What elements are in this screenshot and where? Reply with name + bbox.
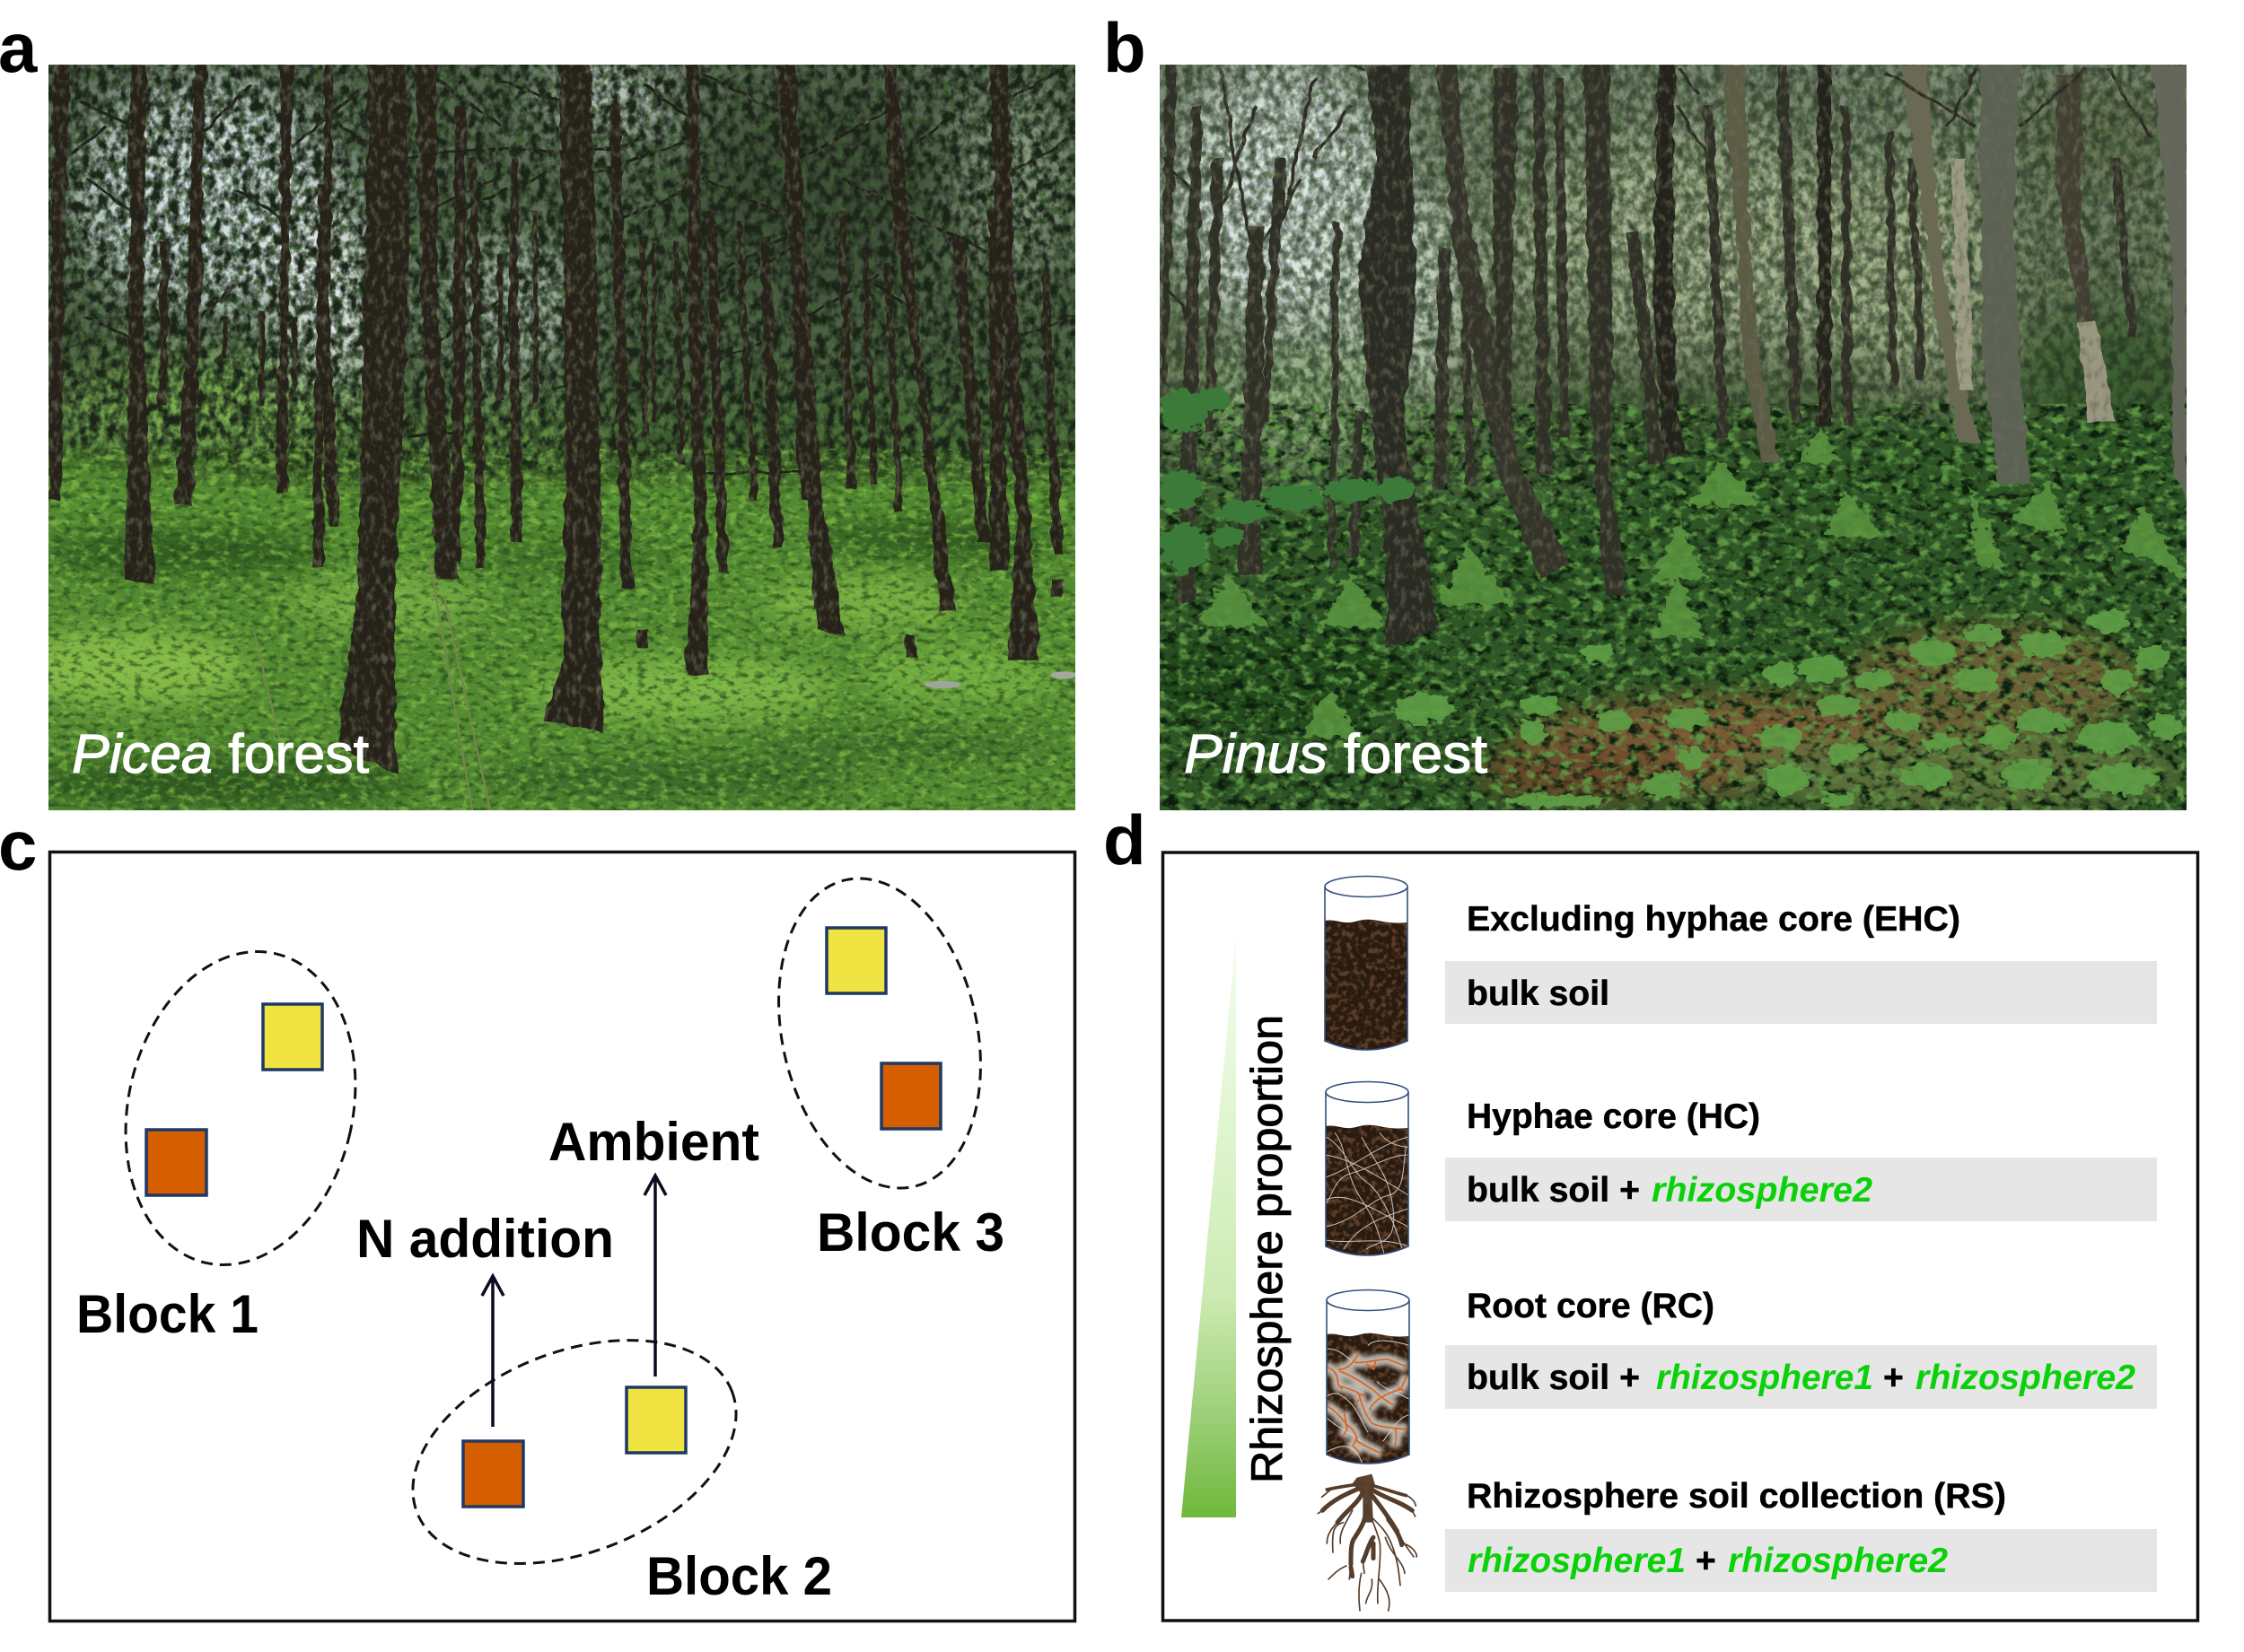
tree trunks <box>48 65 1074 774</box>
row 2: Hyphae core: rhizosphere2 <box>1652 1171 1872 1210</box>
row 4: Rhizosphere soil collection: + <box>1696 1542 1716 1580</box>
gradient triangle: rhizosphere proportion <box>1181 935 1236 1517</box>
Block 2 plots <box>381 1298 768 1606</box>
row 3: Root core <box>1445 1287 2157 1409</box>
row 3: Root core: rhizosphere1 <box>1656 1359 1873 1397</box>
Block 1 plots <box>96 929 385 1288</box>
row 4: Rhizosphere soil collection: rhizosphere1 <box>1468 1542 1686 1580</box>
icon: RC soil core with roots <box>1325 1290 1411 1475</box>
icon: plant root system <box>1318 1474 1416 1611</box>
row 1: Excluding hyphae core: Excluding hyphae core (EHC) <box>1467 900 1960 939</box>
row 1: Excluding hyphae core <box>1445 900 2157 1024</box>
grass slope with light and shade <box>9 453 1086 826</box>
ferns <box>1198 426 2187 738</box>
row 3: Root core: Root core (RC) <box>1467 1287 1714 1325</box>
ground leaves <box>1395 610 2181 807</box>
label: Ambient: Ambient <box>548 1112 759 1172</box>
panel a: Picea forest photo <box>9 63 1086 826</box>
row 3: Root core: bulk soil + <box>1467 1359 1640 1397</box>
row 4: Rhizosphere soil collection: Rhizosphere soil collection (RS) <box>1467 1477 2006 1516</box>
label: N addition: N addition <box>356 1209 614 1269</box>
arrow: N addition <box>482 1276 504 1427</box>
leafy branch at left <box>1159 389 1414 572</box>
row 3: Root core: + <box>1883 1359 1904 1397</box>
Block 3 plots <box>750 859 1009 1208</box>
row 4: Rhizosphere soil collection: rhizosphere2 <box>1728 1542 1948 1580</box>
row 1: Excluding hyphae core: bulk soil <box>1467 975 1609 1013</box>
panel d: sampling cores <box>1163 852 2197 1621</box>
icon: HC soil core with hyphae <box>1324 1082 1410 1267</box>
row 3: Root core: rhizosphere2 <box>1915 1359 2135 1397</box>
icon: EHC soil core <box>1323 876 1409 1062</box>
arrow: Ambient <box>644 1176 666 1377</box>
panel label b: b <box>1103 8 1146 87</box>
photo caption: Picea forest: Picea forest <box>72 723 369 784</box>
Block 2 label: Block 2 <box>646 1546 832 1606</box>
Block 1 label: Block 1 <box>76 1284 259 1344</box>
panel label d: d <box>1103 800 1146 879</box>
axis label: Rhizosphere proportion <box>1243 1015 1292 1483</box>
forest floor <box>1140 415 2199 826</box>
panel b: Pinus forest photo <box>1140 63 2208 826</box>
Block 3 label: Block 3 <box>817 1202 1004 1263</box>
foreground bamboo stems <box>254 558 1076 811</box>
row 2: Hyphae core: bulk soil + <box>1467 1171 1640 1210</box>
row 2: Hyphae core <box>1445 1097 2157 1221</box>
photo caption: Pinus forest: Pinus forest <box>1184 723 1487 784</box>
panel c: experimental blocks <box>50 852 1075 1621</box>
row 2: Hyphae core: Hyphae core (HC) <box>1467 1097 1760 1136</box>
sky glow behind the canopy <box>54 63 1068 472</box>
row 4: Rhizosphere soil collection <box>1445 1477 2157 1592</box>
trunks, ferns and leaves <box>1148 65 2187 807</box>
bright sky and background slope <box>1176 63 2208 485</box>
